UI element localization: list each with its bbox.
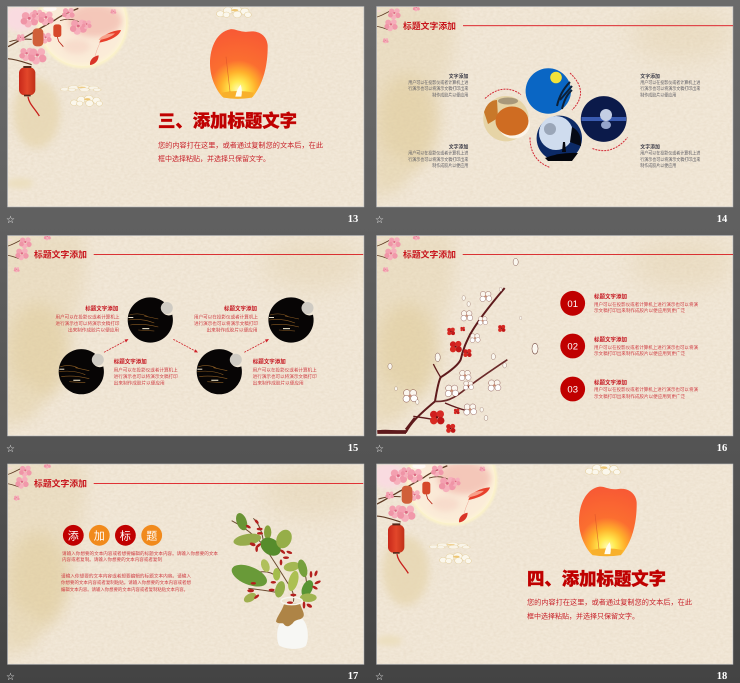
panel: slide 14 [367,2,734,207]
text block 3: 进行演示也可以将演示文稿打印 [114,373,178,380]
numbered item 01: 示文稿打印出来制作成胶片以便应用到更广泛 [594,307,686,314]
numbered item 01: 01 [567,299,578,310]
text block 1: 出来制作成胶片以便应用 [68,327,119,334]
page number: 14 [717,214,728,225]
text block 1: 标题文字添加 [85,305,119,313]
text block: upper left [408,73,469,98]
text block: upper right: 文字添加 [640,73,660,80]
text block 2: 用户可以在投影仪或者计算机上 [194,314,259,320]
title circles: 加 [94,529,105,542]
numbered item 01: 用户可以在投影仪或者计算机上进行演示也可以将演 [594,301,699,308]
text block 3 [114,357,178,386]
text block 1 [62,550,219,563]
blossom corner [8,234,51,272]
text block 4: 进行演示也可以将演示文稿打印 [253,373,317,380]
numbered item 02 [560,334,699,358]
text block 2: 你想要的文本内容或者复制粘贴。请输入你想要的文本内容或者想 [61,579,192,586]
image: blue moon circle [526,68,572,114]
text block: lower right: 用户可以在投影仪或者计算机上进 [640,150,701,157]
image: full moon circle [537,116,582,161]
heading: 标题文字添加 [403,20,456,31]
image circle 1 [128,297,176,343]
text block: 您的内容打在这里，或者通过复制您的文本后，在此 [158,140,323,150]
text block 2: 编辑文本内容。请输入你想要的文本内容或者复制粘贴文本内容。 [61,586,188,593]
text block 1 [56,305,120,334]
text block 2: 请输入你想要的文本内容或者想要编辑的标题文本内容。请输入 [61,573,192,580]
title circles: 添 [68,528,79,542]
text block: lower right: 制作成胶片以便应用 [640,162,676,169]
text block 2: 标题文字添加 [224,305,257,313]
arrows [104,339,269,352]
numbered item 02: 02 [567,342,578,352]
icon: star: ☆ [6,444,15,455]
text block 4: 出来制作成胶片以便应用 [253,379,304,386]
text block 2 [194,305,259,334]
text block: upper right: 行演示也可以将演示文稿打印出来 [640,85,701,92]
text block [527,598,692,620]
text block 1: 内容或者复制。请输入你想要的文本内容或者复制 [62,556,162,563]
numbered item 02: 标题文字添加 [594,336,628,344]
text block: upper right: 制作成胶片以便应用 [640,91,676,98]
panel: slide 18 [373,434,733,665]
text block: lower right [640,144,701,169]
image circle 2 [59,349,107,394]
heading: 标题文字添加 [34,248,87,259]
icon: star: ☆ [6,672,15,683]
text block: 您的内容打在这里，或者通过复制您的文本后，在此 [527,598,692,606]
blossom corner [377,234,420,272]
title: 三、添加标题文字 [158,111,297,131]
text block: upper left: 制作成胶片以便应用 [432,91,468,98]
text block [158,140,323,163]
numbered item 03: 标题文字添加 [594,378,628,386]
image circle 4 [268,297,317,343]
text block: upper left: 行演示也可以将演示文稿打印出来 [408,85,469,92]
moon, blossoms, lanterns, clouds and sky lantern illustration [4,0,268,189]
numbered item 03: 用户可以在投影仪或者计算机上进行演示也可以将演 [594,386,699,393]
text block 4 [253,357,317,386]
text block 2 [61,573,192,593]
panel: slide 13 [4,0,364,207]
text block 2: 出来制作成胶片以便应用 [206,327,258,334]
icon: star: ☆ [6,215,15,226]
text block: lower left [408,144,469,169]
text block: lower left: 用户可以在投影仪或者计算机上进 [408,150,469,157]
title circles [63,525,162,546]
page number: 17 [348,671,358,682]
icon: star: ☆ [375,672,384,683]
blossom corner [377,5,420,43]
title circles: 题 [146,529,157,542]
panel: slide 17 [0,459,365,665]
image: night lake circle [581,96,627,142]
text block: upper right: 用户可以在投影仪或者计算机上进 [640,79,701,86]
page number: 18 [717,671,727,682]
text block: upper left: 用户可以在投影仪或者计算机上进 [408,79,469,86]
numbered item 01 [560,291,699,316]
text block: upper left: 文字添加 [449,73,468,80]
text block: lower right: 行演示也可以将演示文稿打印出来 [640,156,701,163]
panel: slide 16 [367,231,734,436]
moon, blossoms, lanterns, clouds and sky lantern illustration [373,434,637,646]
page number: 13 [348,214,358,225]
text block: upper right [640,73,701,98]
text block: lower left: 行演示也可以将演示文稿打印出来 [408,156,469,163]
text block: 框中选择粘贴，并选择只保留文字。 [527,612,639,620]
plant in vase illustration [229,511,321,649]
text block 3: 用户可以在投影仪或者计算机上 [114,366,178,373]
text block 3: 标题文字添加 [114,357,147,365]
numbered item 03: 示文稿打印出来制作成胶片以便应用到更广泛 [594,393,686,400]
dashed arcs [485,73,628,168]
image circle 3 [197,349,245,394]
plum blossom branch [377,258,538,433]
page number: 15 [348,443,358,454]
numbered item 02: 用户可以在投影仪或者计算机上进行演示也可以将演 [594,344,699,351]
text block: 框中选择粘贴，并选择只保留文字。 [158,154,270,163]
icon: star: ☆ [375,444,384,455]
text block 2: 进行演示也可以将演示文稿打印 [194,320,258,327]
heading: 标题文字添加 [34,477,87,488]
text block: lower right: 文字添加 [640,144,660,150]
text block 4: 标题文字添加 [253,357,286,365]
heading: 标题文字添加 [403,248,456,259]
text block 3: 出来制作成胶片以便应用 [114,379,165,386]
panel: slide 15 [0,231,365,436]
title circles: 标 [120,528,131,542]
text block: lower left: 文字添加 [449,144,468,150]
text block 1: 用户可以在投影仪或者计算机上 [56,314,120,320]
blossom corner [8,462,51,501]
image: mooncake circle [483,96,530,141]
text block: lower left: 制作成胶片以便应用 [432,162,468,169]
numbered item 03 [560,377,699,401]
text block 4: 用户可以在投影仪或者计算机上 [253,366,317,373]
text block 1: 进行演示也可以将演示文稿打印 [56,320,120,327]
page number: 16 [717,443,727,454]
icon: star: ☆ [375,215,384,226]
numbered item 03: 03 [567,384,578,396]
numbered item 01: 标题文字添加 [594,293,628,301]
title: 四、添加标题文字 [527,569,666,589]
numbered item 02: 示文稿打印出来制作成胶片以便应用到更广泛 [594,350,686,357]
text block 1: 请输入你想要的文本内容或者想要编辑的标题文本内容。请输入你想要的文本 [62,550,219,557]
